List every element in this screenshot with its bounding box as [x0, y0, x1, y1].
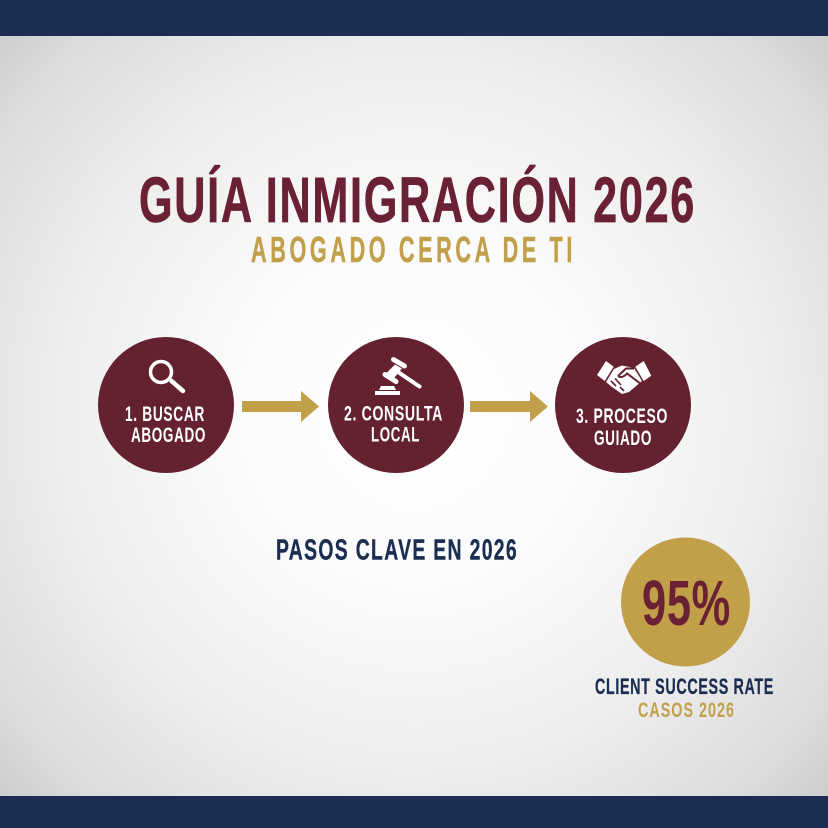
step 2 label: 2. CONSULTA: [344, 402, 443, 426]
step 1: buscar abogado: [98, 337, 234, 473]
step 1 label: 1. BUSCAR: [125, 402, 205, 426]
bottom navy band: [0, 796, 828, 828]
icon: handshake: [597, 361, 651, 394]
step 2 label: LOCAL: [371, 422, 420, 446]
stat sublabel: CASOS 2026: [638, 699, 735, 722]
step 3: proceso guiado: [555, 337, 691, 473]
section caption: PASOS CLAVE EN 2026: [276, 534, 518, 566]
icon: magnifying glass: [150, 362, 183, 391]
subtitle: ABOGADO CERCA DE TI: [251, 229, 576, 270]
step 2 label: [344, 402, 443, 446]
step 3 label: GUIADO: [594, 426, 652, 450]
step 3 label: [576, 404, 668, 450]
stat value: 95%: [642, 567, 731, 639]
icon: gavel: [375, 360, 420, 395]
top navy band: [0, 0, 828, 36]
arrow: step 1 to step 2: [242, 391, 319, 422]
arrow: step 2 to step 3: [470, 391, 548, 422]
step 1 label: ABOGADO: [131, 423, 206, 447]
stat badge: [621, 538, 750, 666]
step 3 label: 3. PROCESO: [576, 404, 668, 428]
step 2: consulta local: [328, 337, 464, 473]
step 1 label: [125, 402, 206, 447]
